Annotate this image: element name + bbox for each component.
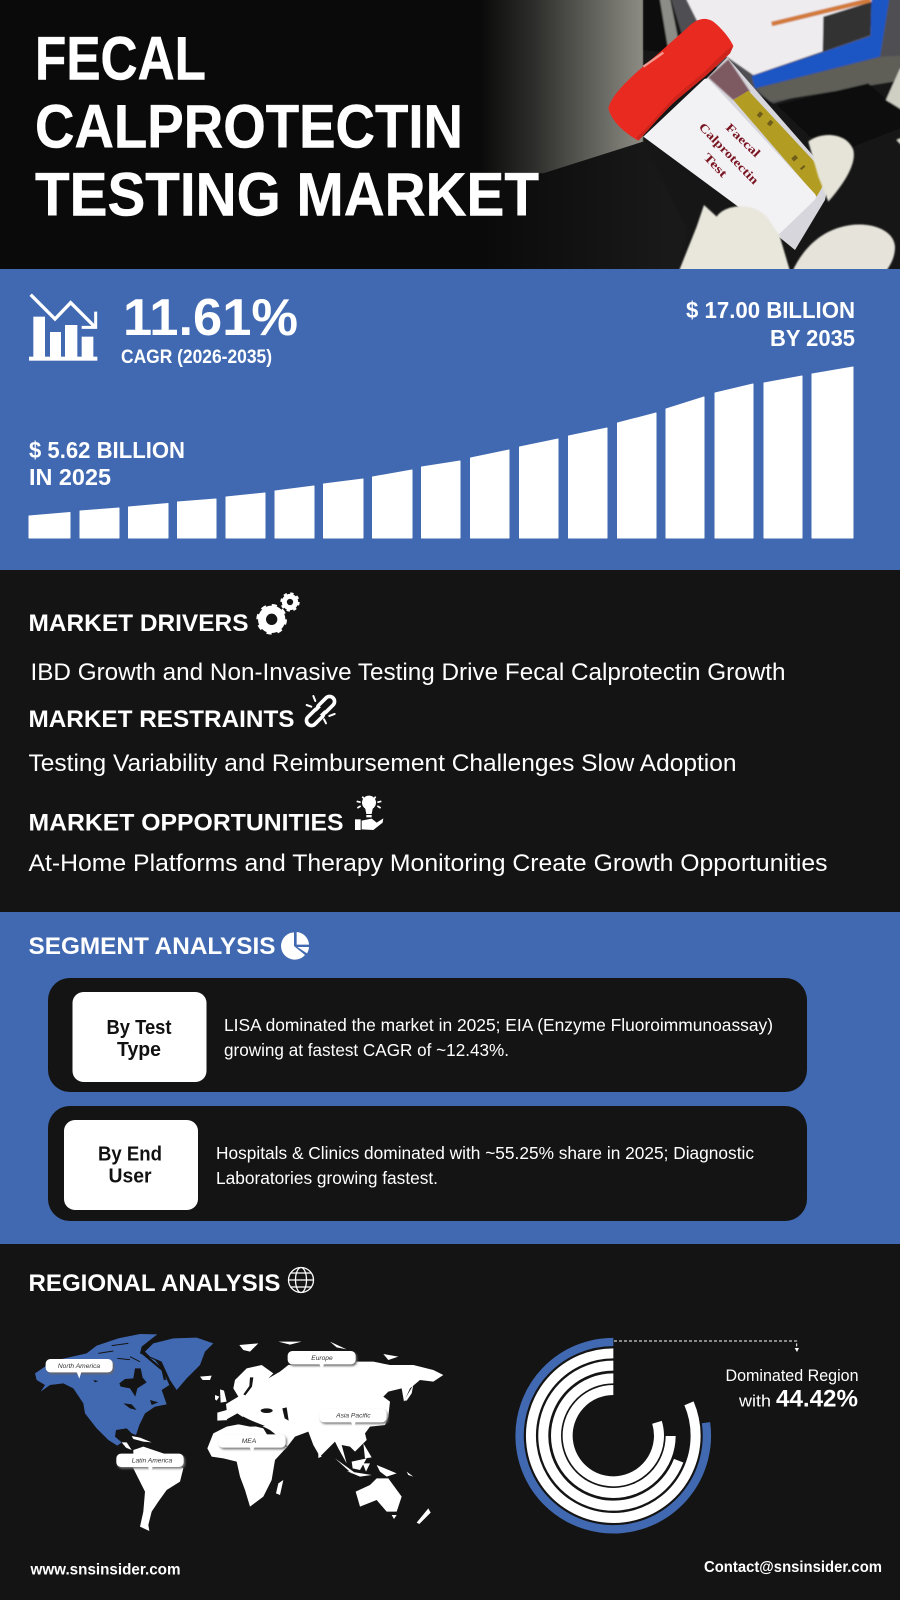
icon: broken chain [304,694,337,728]
title: FECAL [35,24,206,94]
panel: market size and CAGR [0,269,900,570]
callout: MEA: MEA [242,1438,257,1445]
North America and Greenland highlighted [35,1334,213,1446]
heading: market restraints: MARKET RESTRAINTS [28,706,294,733]
heading: market drivers: MARKET DRIVERS [28,610,248,637]
gloved thumb and finger [678,204,790,269]
segment card: by end user: Hospitals & Clinics dominated with ~55.25% share in 2025; Diagnostic [216,1143,754,1163]
dominated region label [726,1367,858,1412]
panel: market dynamics [0,570,900,912]
heading: regional analysis: REGIONAL ANALYSIS [28,1270,280,1297]
bar chart: market growth [29,367,853,538]
title: CALPROTECTIN [35,92,463,162]
callout: Asia Pacific [319,1409,388,1429]
icon: declining chart [29,295,97,361]
segment card: by test type: LISA dominated the market in 2025; EIA (Enzyme Fluoroimmunoassay) [224,1015,773,1035]
dashed leader arrow [614,1341,799,1352]
2035 value: $ 17.00 BILLION [686,297,855,323]
2035 value [686,297,855,351]
segment card: by end user: By End [98,1144,162,1166]
callout: Asia Pacific: Asia Pacific [335,1413,371,1420]
text: opportunities: At-Home Platforms and Therapy Monitoring Create Growth Opportunities [28,850,828,877]
CAGR value: CAGR (2026-2035) [121,347,272,368]
callout: Europe: Europe [311,1355,333,1362]
segment card: by end user: Laboratories growing fastest. [216,1168,438,1188]
Americas [35,1334,213,1531]
dominated region label: with [738,1392,771,1410]
world map [35,1334,443,1531]
icon: bulb in hand [355,796,383,830]
2025 value: IN 2025 [29,464,111,490]
panel: regional analysis [0,1244,900,1600]
callout: North America [46,1359,114,1379]
icon: pie chart [281,932,309,960]
segment card: by end user [48,1106,807,1221]
footer: website: www.snsinsider.com [30,1562,181,1578]
text: restraints: Testing Variability and Reimbursement Challenges Slow Adoption [28,750,736,777]
text: drivers: IBD Growth and Non-Invasive Testing Drive Fecal Calprotectin Growth [30,659,785,686]
jar label text: Calprotectin [696,120,762,187]
dominated region label: Dominated Region [726,1367,858,1385]
segment card: by test type: By Test [106,1017,172,1039]
callout: Latin America [116,1454,185,1474]
panel: segment analysis [0,912,900,1244]
label [643,78,816,235]
segment card: by test type: growing at fastest CAGR of ~12.43%. [224,1040,509,1060]
jar label text [700,122,761,185]
dominated region label: 44.42% [776,1386,858,1412]
heading: market opportunities: MARKET OPPORTUNITIES [28,810,344,836]
segment card: by test type: Type [117,1039,161,1061]
CAGR value: 11.61% [123,289,298,347]
segment card: by end user: User [108,1166,152,1188]
footer: contact: Contact@snsinsider.com [704,1559,882,1576]
2035 value: BY 2035 [770,325,855,351]
inland seas [227,1377,289,1445]
lid [608,19,733,141]
segment card: by test type [48,978,807,1092]
icon: gears [258,593,299,633]
South America and Caribbean [122,1376,212,1531]
jar label text: Faecal [723,120,764,161]
Europe, Africa, Asia and Oceania [207,1342,443,1524]
icon: globe [288,1268,314,1292]
2025 value: $ 5.62 BILLION [29,437,185,463]
callout: MEA [218,1434,287,1454]
callout: North America: North America [58,1363,100,1370]
radial chart [520,1341,799,1529]
jar label text: Test [701,150,730,180]
finger behind jar [808,135,854,202]
title: TESTING MARKET [35,160,539,230]
callout: Europe [288,1351,357,1371]
callout: Latin America: Latin America [132,1458,173,1465]
title [35,24,539,230]
heading: segment analysis: SEGMENT ANALYSIS [28,933,276,960]
header background [0,0,900,270]
jar glass [707,57,830,250]
photo: specimen jar held in gloved hand [480,0,900,277]
2025 value [29,437,185,490]
